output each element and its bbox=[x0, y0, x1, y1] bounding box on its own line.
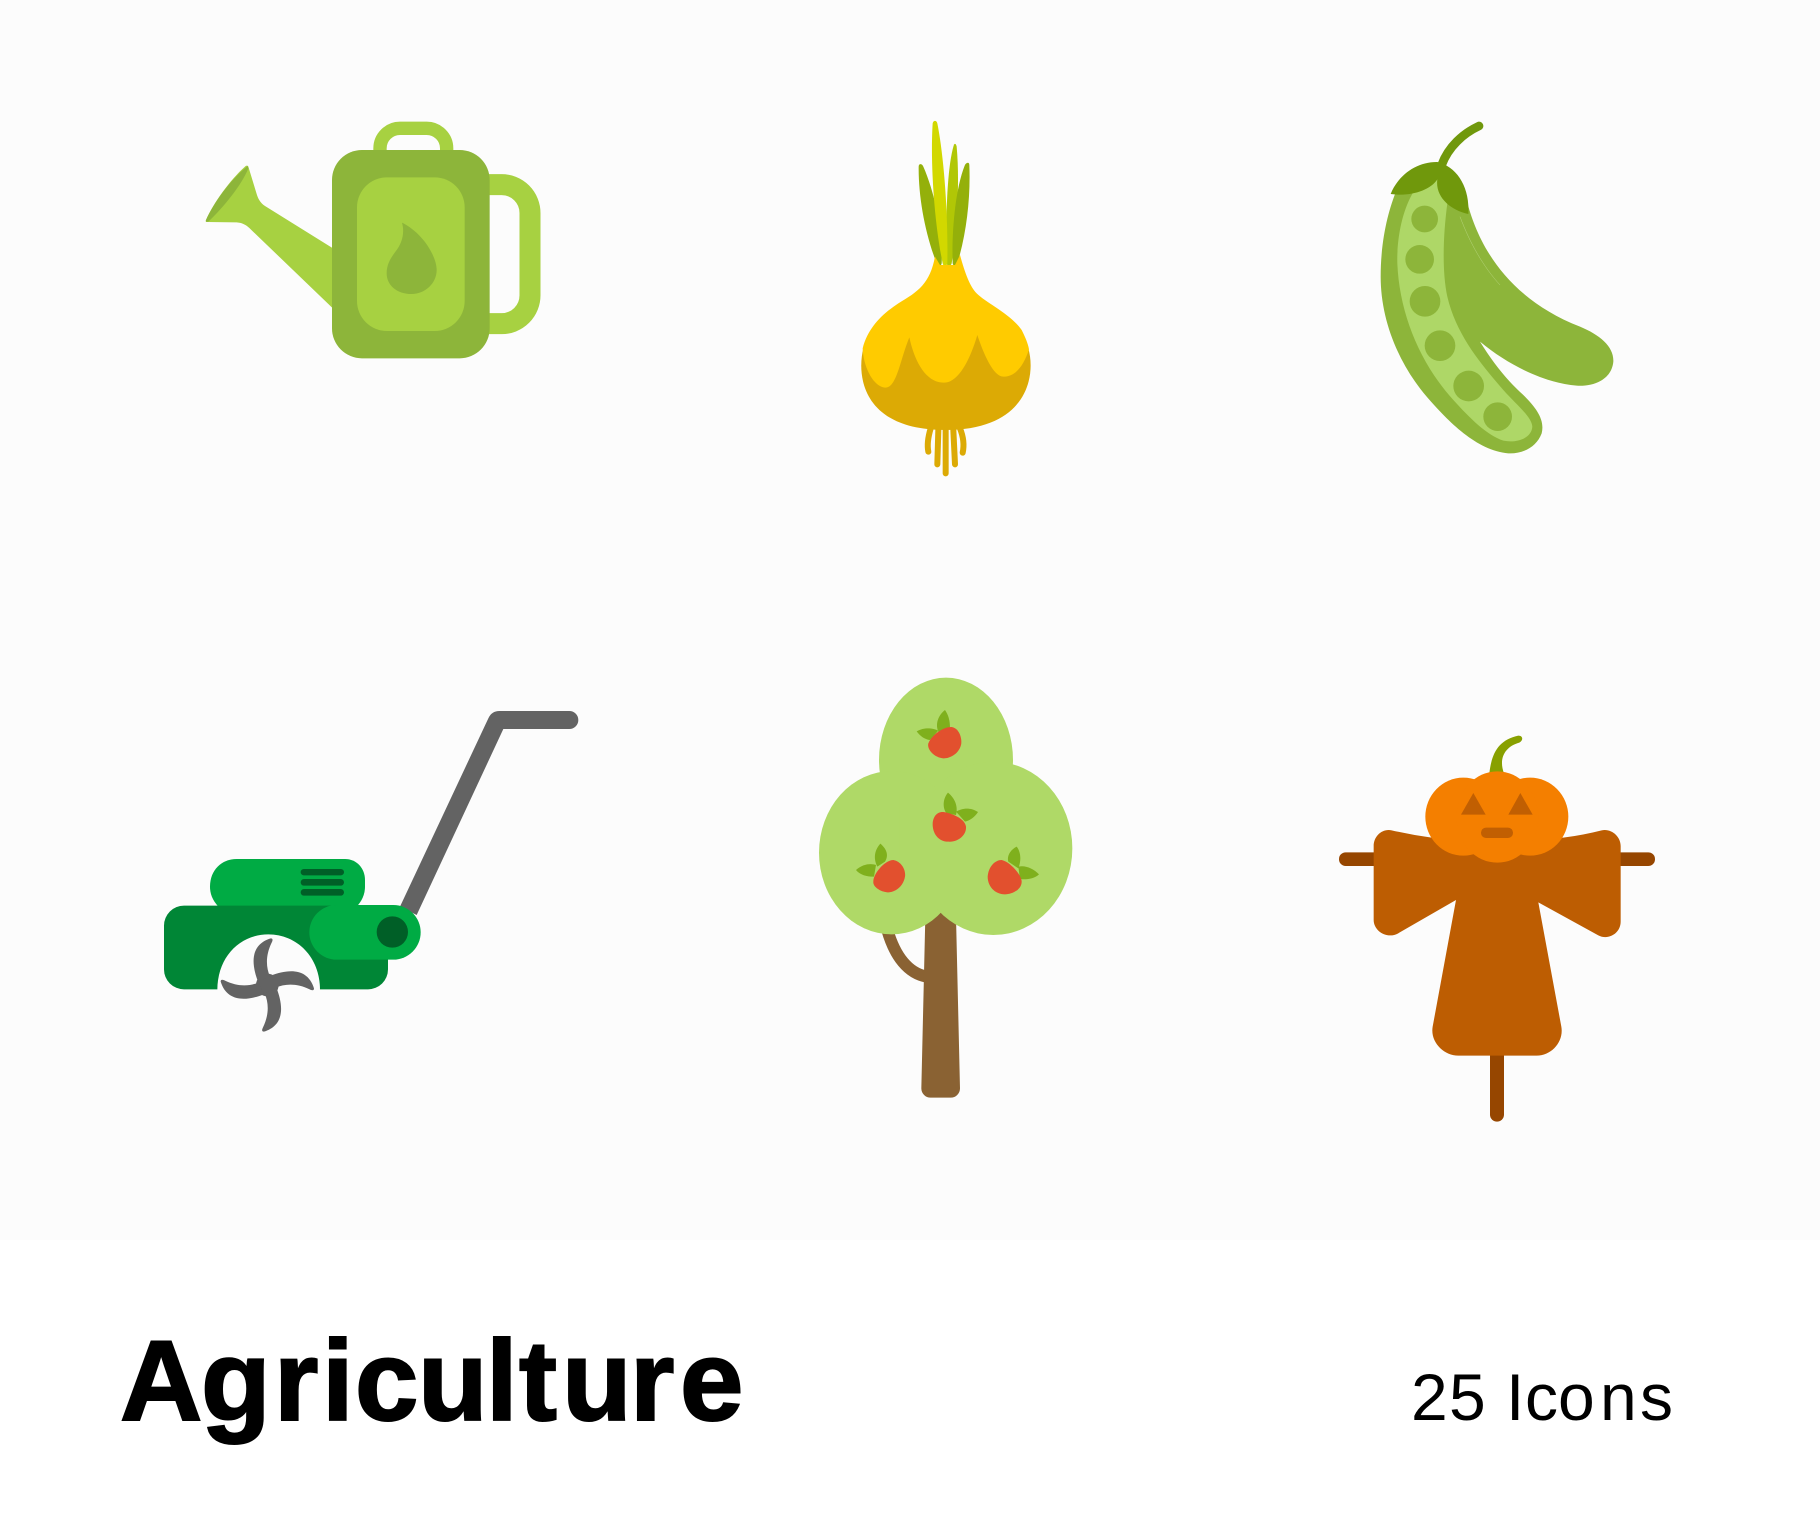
fruit: left apple bbox=[856, 844, 905, 892]
fruit: top apple bbox=[917, 710, 961, 758]
title: Agriculture bbox=[120, 1318, 743, 1445]
fruit: right apple bbox=[988, 847, 1039, 894]
icon: onion bbox=[861, 121, 1031, 473]
icon: apple tree bbox=[819, 678, 1072, 1098]
icon: watering can bbox=[206, 128, 530, 358]
icon: pea pod bbox=[1381, 126, 1613, 453]
icon: scarecrow with pumpkin head bbox=[1339, 736, 1655, 1122]
icon count: 25 Icons bbox=[1411, 1360, 1673, 1434]
fruit: centre apple bbox=[933, 793, 978, 842]
icon: lawn mower tiller bbox=[164, 711, 578, 1032]
